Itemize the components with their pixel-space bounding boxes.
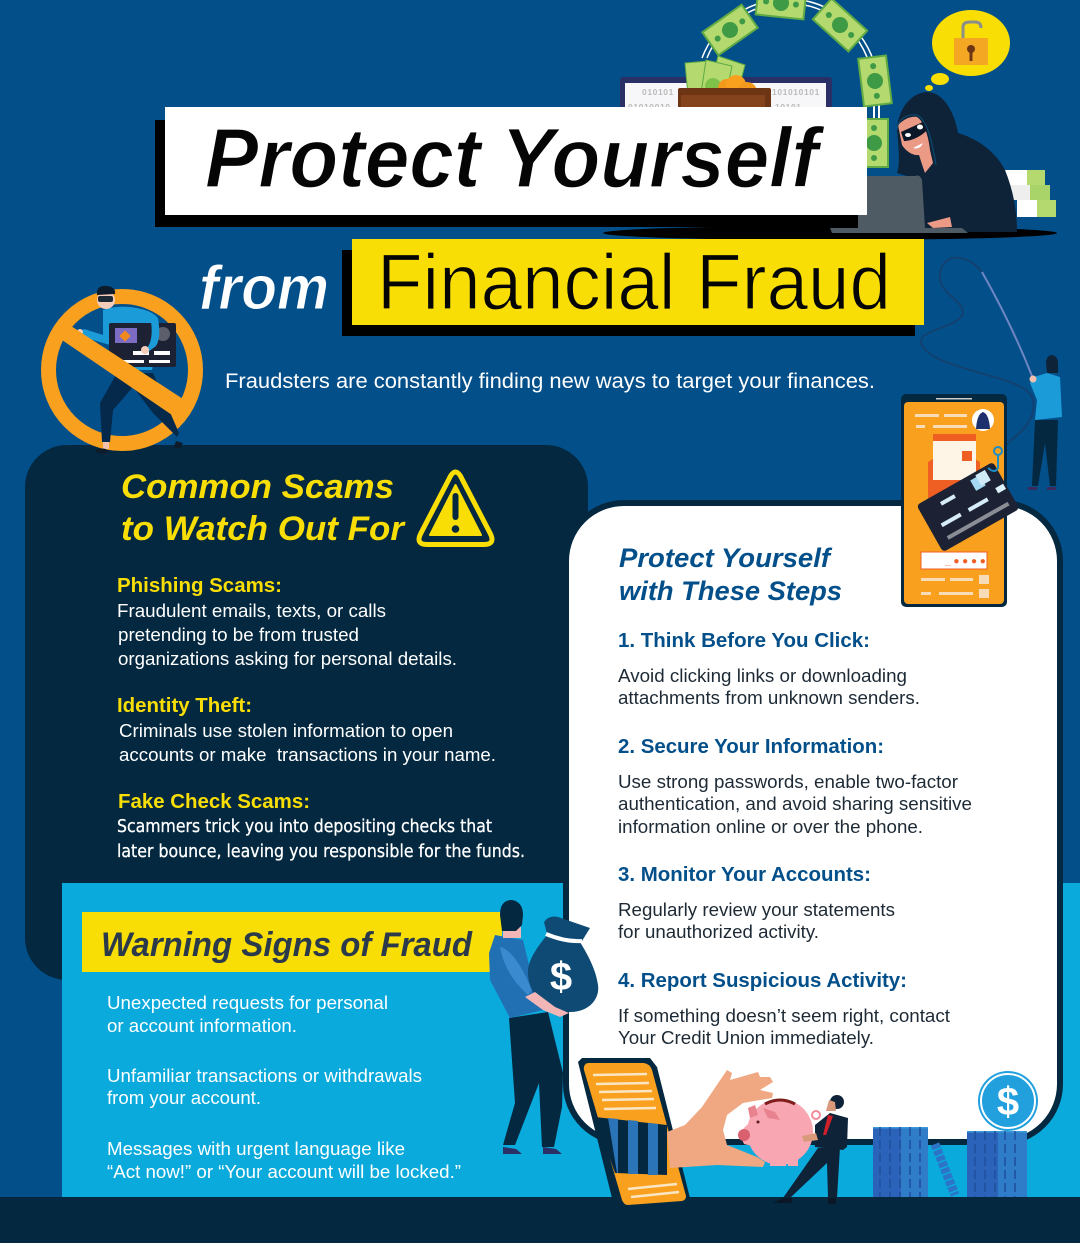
illustration: fishing line and fraudster [921, 258, 1062, 490]
footer band [0, 1197, 1080, 1243]
illustration: piggy bank [738, 1099, 820, 1166]
heading: common scams: to Watch Out For [121, 510, 406, 548]
heading: common scams [121, 468, 406, 548]
text block: identity theft [117, 694, 496, 765]
step 1: attachments from unknown senders. [618, 687, 920, 708]
illustration: cash stacks [1005, 170, 1056, 217]
illustration: phone with hand [578, 1058, 773, 1208]
step 1: 1. Think Before You Click: [618, 630, 870, 652]
banner: warning signs: Warning Signs of Fraud [101, 926, 473, 964]
icon: dollar coin [978, 1071, 1038, 1131]
text block: identity theft: Identity Theft: [117, 694, 252, 717]
text block: phishing: Fraudulent emails, texts, or calls [117, 600, 386, 621]
ground shadow [603, 226, 1057, 240]
heading: protect steps: with These Steps [619, 576, 842, 606]
illustration: coin stacks [873, 1127, 1027, 1197]
illustration: phishing phone [901, 394, 1020, 607]
panel: common scams background [25, 445, 588, 980]
step 4: 4. Report Suspicious Activity: [618, 970, 907, 992]
illustration: thought bubble with open padlock [925, 10, 1010, 91]
illustration: businessman pushing [773, 1095, 848, 1204]
text block: warning signs list [107, 992, 461, 1182]
step 3: Regularly review your statements [618, 899, 895, 920]
step 4: If something doesn’t seem right, contact [618, 1005, 950, 1026]
illustration: hooded hacker at laptop [830, 92, 1017, 233]
illustration: thief with money bag: $ [550, 955, 572, 999]
text block: fake check: Scammers trick you into depositing checks that [117, 816, 492, 837]
heading: common scams: Common Scams [121, 468, 394, 506]
illustration: no-sign with card thief [48, 286, 196, 454]
illustration: monitor, wallet and money arc [620, 0, 892, 167]
title: Protect Yourself: Protect Yourself [205, 111, 825, 205]
text block: warning signs list: Messages with urgent language like [107, 1138, 405, 1159]
text block: warning signs list: “Act now!” or “Your account will be locked.” [107, 1161, 461, 1182]
icon: warning triangle [419, 472, 492, 544]
icon: dollar coin: $ [997, 1080, 1019, 1124]
illustration: monitor, wallet and money arc: 101010101 [772, 87, 820, 97]
panel: warning signs background [62, 883, 582, 1197]
text block: fake check: Fake Check Scams: [118, 790, 310, 813]
text block: warning signs list: Unfamiliar transactions or withdrawals [107, 1065, 422, 1086]
step 2: 2. Secure Your Information: [618, 736, 884, 758]
step 2: authentication, and avoid sharing sensitive [618, 793, 972, 814]
step 4: Your Credit Union immediately. [618, 1027, 874, 1048]
heading: protect steps: Protect Yourself [619, 543, 833, 573]
text block: identity theft: Criminals use stolen information to open [119, 720, 453, 741]
right cyan band [563, 883, 1080, 1197]
illustration: thief with money bag [489, 900, 598, 1154]
text block: warning signs list: Unexpected requests for personal [107, 992, 388, 1013]
step 4 [618, 970, 950, 1048]
panel text: protect steps [618, 543, 972, 1048]
text block: phishing: Phishing Scams: [117, 574, 282, 597]
text block: phishing: pretending to be from trusted [118, 624, 359, 645]
intro text: Fraudsters are constantly finding new ways to target your finances. [225, 369, 875, 393]
step 1: Avoid clicking links or downloading [618, 665, 907, 686]
title banner: Financial Fraud: Financial Fraud [377, 237, 891, 326]
panel text: common scams [117, 468, 525, 862]
heading: protect steps [619, 543, 842, 606]
title shadow [155, 120, 858, 227]
subtitle word: from: from [199, 254, 329, 323]
text block: warning signs list: from your account. [107, 1087, 261, 1108]
text block: fake check [117, 790, 525, 862]
step 1 [618, 630, 920, 708]
illustration: phishing phone: _ ● ● ● ● [944, 556, 986, 567]
illustration: monitor, wallet and money arc: 01010010 [628, 102, 671, 112]
step 3: for unauthorized activity. [618, 921, 819, 942]
illustration: monitor, wallet and money arc: 010101 [642, 87, 674, 97]
step 2: Use strong passwords, enable two-factor [618, 771, 958, 792]
step 3: 3. Monitor Your Accounts: [618, 864, 871, 886]
text block: fake check: later bounce, leaving you responsible for the funds. [117, 841, 525, 862]
text block: phishing [117, 574, 457, 669]
text block: warning signs list: or account information. [107, 1015, 297, 1036]
title banner [165, 107, 867, 215]
panel: protect steps card [566, 503, 1060, 1142]
text block: phishing: organizations asking for personal details. [118, 648, 457, 669]
text block: identity theft: accounts or make transactions in your name. [119, 744, 496, 765]
illustration: monitor, wallet and money arc: 10101 [775, 102, 802, 112]
step 2 [618, 736, 972, 837]
title shadow: Financial Fraud [342, 250, 915, 336]
step 2: information online or over the phone. [618, 816, 923, 837]
step 3 [618, 864, 895, 942]
banner: warning signs [82, 912, 502, 972]
